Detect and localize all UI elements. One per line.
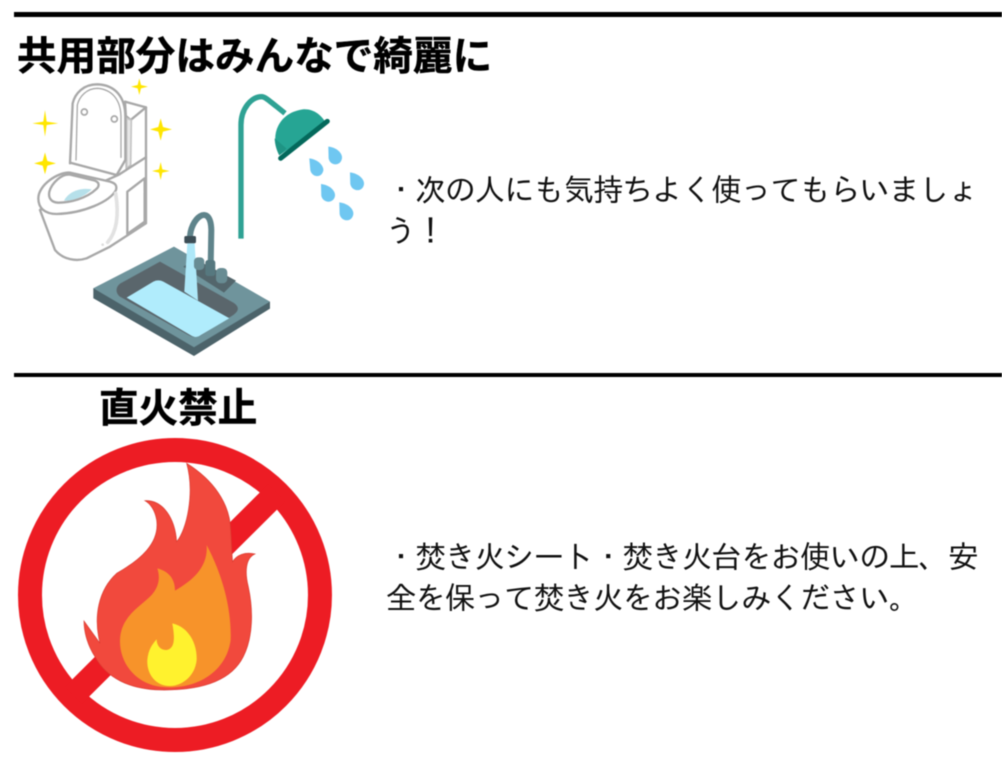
inner flame — [147, 623, 197, 686]
text: open fire note: ・焚き火シート・焚き火台をお使いの上、安 — [386, 540, 978, 575]
text: open fire note: 全を保って焚き火をお楽しみください。 — [386, 580, 918, 616]
heading: no open fires: 直火禁止 — [99, 387, 257, 431]
icon: shower — [241, 97, 364, 239]
text: shared spaces note: ・次の人にも気持ちよく使ってもらいましょ — [386, 173, 978, 208]
text: shared spaces note — [386, 173, 978, 248]
icon: sparkles — [32, 78, 172, 180]
text: shared spaces note: う！ — [386, 214, 445, 248]
text: open fire note — [386, 540, 978, 616]
icon: sink — [93, 215, 270, 356]
icon: toilet — [38, 84, 146, 260]
heading: shared spaces: 共用部分はみんなで綺麗に — [17, 35, 492, 79]
middle flame — [120, 545, 231, 687]
icon: no fire sign — [30, 450, 320, 740]
outer flame — [84, 463, 255, 690]
